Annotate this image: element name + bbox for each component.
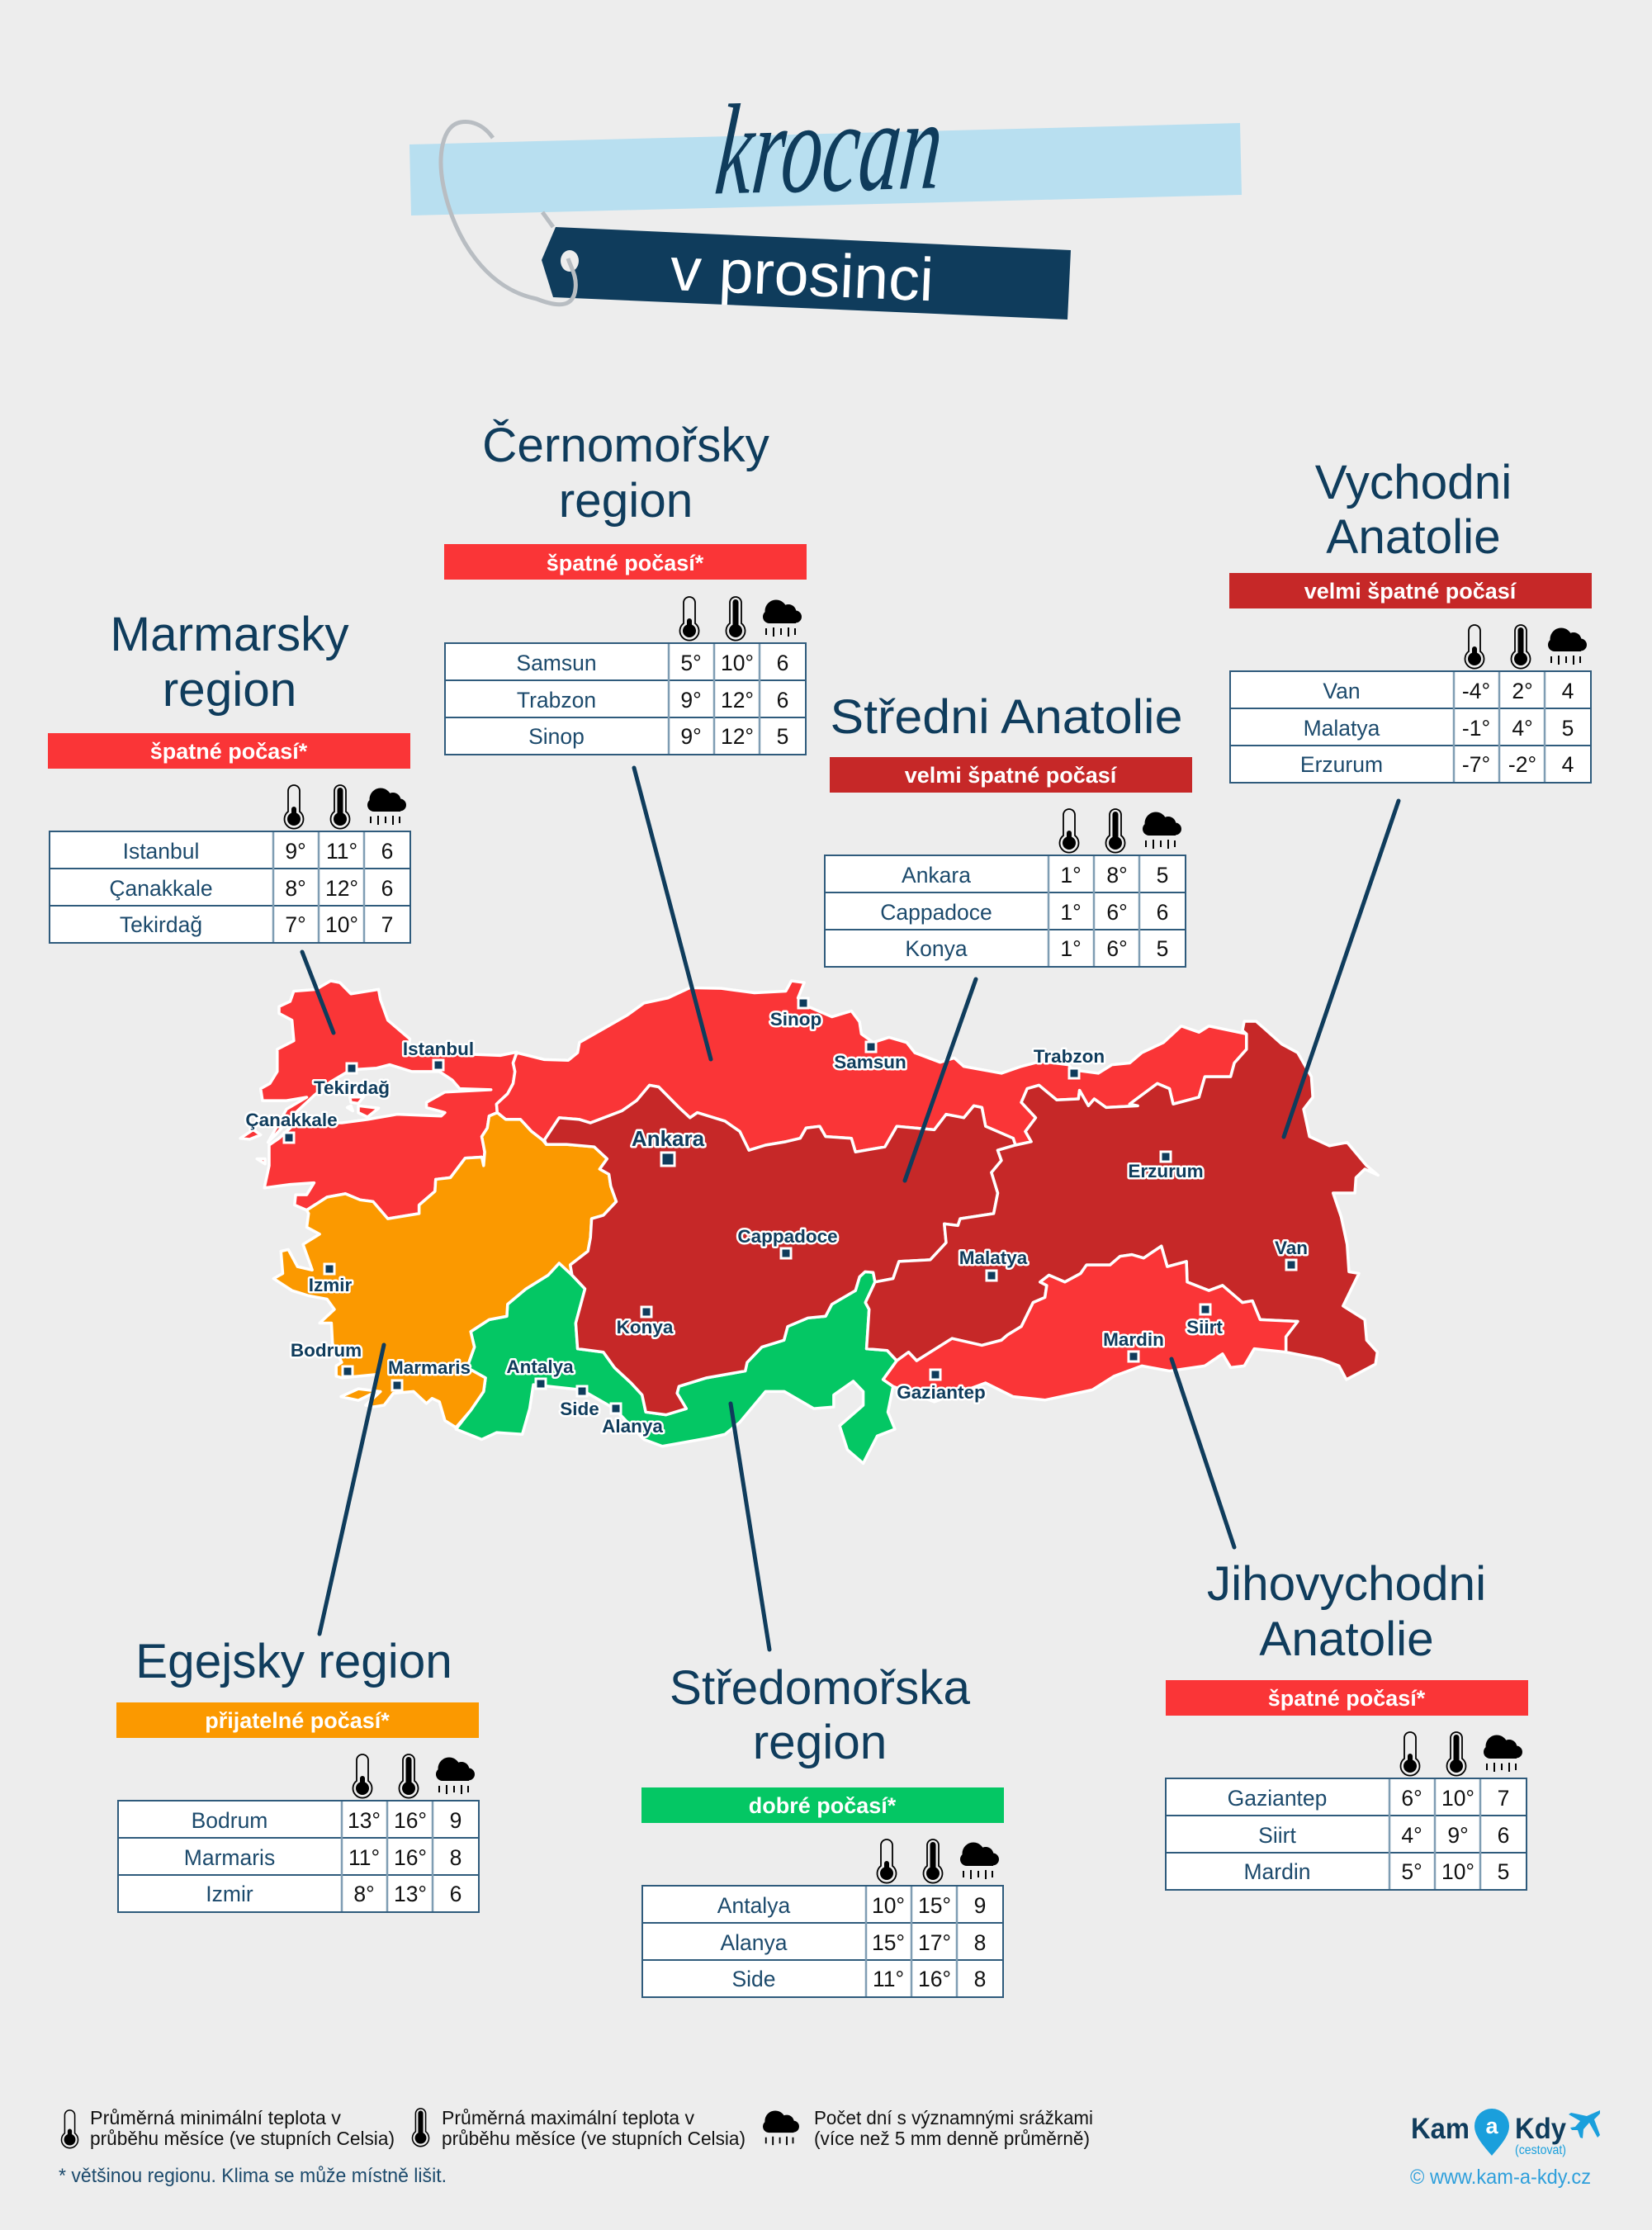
pointer: Aegean bbox=[320, 1345, 384, 1634]
city: Alanya: Alanya bbox=[602, 1416, 663, 1437]
data table: Antalya bbox=[717, 1893, 790, 1918]
legend text: maximum temperature: průběhu měsíce (ve stupních Celsia) bbox=[442, 2128, 746, 2149]
city: Cappadoce bbox=[737, 1226, 838, 1258]
light blue strip bbox=[409, 123, 1242, 215]
data table: Side bbox=[731, 1967, 776, 1991]
data table: 11° bbox=[348, 1845, 380, 1870]
data table: 5 bbox=[1157, 936, 1168, 961]
data table: 16° bbox=[394, 1808, 427, 1833]
data table: 9° bbox=[285, 839, 306, 864]
city: Tekirdağ bbox=[314, 1063, 390, 1098]
heading: region bbox=[163, 663, 296, 717]
city: Van: Van bbox=[1275, 1238, 1308, 1258]
data table: 13° bbox=[394, 1882, 427, 1906]
data table: 10° bbox=[721, 651, 754, 675]
panel: Vychodni Anatolie bbox=[1229, 456, 1592, 783]
city: Bodrum bbox=[291, 1340, 362, 1376]
data table: 2° bbox=[1512, 679, 1533, 703]
data table: 8° bbox=[285, 876, 306, 901]
panel: Jihovychodni Anatolie bbox=[1166, 1557, 1528, 1890]
data table bbox=[1166, 1732, 1527, 1890]
city: Samsun bbox=[834, 1042, 906, 1072]
region: Mediterranean bbox=[456, 1263, 897, 1463]
logo letter a: a bbox=[1485, 2114, 1498, 2138]
region: Marmara bbox=[240, 981, 517, 1219]
heading: Středni Anatolie bbox=[831, 690, 1182, 744]
data table: Ankara bbox=[902, 863, 971, 888]
data table: 9 bbox=[974, 1893, 986, 1918]
data table: 6° bbox=[1106, 936, 1128, 961]
data table: Istanbul bbox=[123, 839, 199, 864]
heading: Anatolie bbox=[1259, 1612, 1434, 1666]
weather band bbox=[444, 544, 807, 580]
weather label: špatné počasí* bbox=[150, 739, 308, 764]
panel: Černomořsky region bbox=[444, 419, 807, 755]
logo pin bbox=[1474, 2109, 1509, 2156]
heading: Jihovychodni bbox=[1207, 1557, 1486, 1611]
heading: Anatolie bbox=[1326, 510, 1501, 564]
data table: 12° bbox=[325, 876, 358, 901]
region: Eastern Anatolia bbox=[865, 1021, 1378, 1380]
data table bbox=[642, 1839, 1003, 1997]
city: Malatya: Malatya bbox=[959, 1248, 1028, 1268]
website: © www.kam-a-kdy.cz bbox=[1410, 2166, 1591, 2189]
pointer: Marmara bbox=[302, 952, 334, 1033]
city: Trabzon: Trabzon bbox=[1034, 1046, 1105, 1067]
data table: 5° bbox=[680, 651, 702, 675]
city: Mardin: Mardin bbox=[1103, 1329, 1164, 1350]
data table: 16° bbox=[918, 1967, 951, 1991]
city: Side bbox=[560, 1386, 599, 1419]
tag hole bbox=[561, 250, 579, 272]
pointer: Mediterranean bbox=[731, 1404, 769, 1650]
data table: 16° bbox=[394, 1845, 427, 1870]
data table: Çanakkale bbox=[109, 876, 213, 901]
data table: 5 bbox=[1562, 716, 1574, 741]
weather label: přijatelné počasí* bbox=[205, 1708, 390, 1733]
data table: Izmir bbox=[206, 1882, 253, 1906]
data table: 9 bbox=[450, 1808, 462, 1833]
region: Central Anatolia bbox=[544, 1085, 1015, 1415]
legend icon: maximum temperature bbox=[412, 2109, 429, 2147]
weather label: špatné počasí* bbox=[547, 551, 704, 575]
weather band bbox=[1166, 1680, 1528, 1716]
city: Gaziantep: Gaziantep bbox=[897, 1382, 986, 1403]
city: Malatya bbox=[959, 1248, 1028, 1281]
city: Siirt bbox=[1186, 1304, 1223, 1338]
data table: 7° bbox=[285, 912, 306, 937]
panel: Marmarsky region bbox=[48, 608, 410, 943]
data table: 10° bbox=[872, 1893, 905, 1918]
heading: region bbox=[753, 1716, 887, 1769]
city: Antalya: Antalya bbox=[506, 1356, 574, 1377]
data table: Samsun bbox=[516, 651, 597, 675]
map of Turkey bbox=[240, 768, 1399, 1650]
data table: 10° bbox=[1441, 1786, 1474, 1811]
city: Istanbul bbox=[403, 1039, 474, 1070]
weather band bbox=[116, 1702, 479, 1738]
data table: 9° bbox=[680, 688, 702, 713]
data table: 7 bbox=[381, 912, 393, 937]
pointer: Eastern Anatolia bbox=[1284, 801, 1399, 1137]
panel: Středomořska region bbox=[641, 1661, 1004, 1997]
city: Konya: Konya bbox=[617, 1317, 674, 1338]
city: Çanakkale bbox=[245, 1110, 338, 1143]
data table: 4 bbox=[1562, 752, 1574, 777]
data table: 4° bbox=[1401, 1823, 1422, 1848]
city: Antalya bbox=[506, 1356, 574, 1389]
tag ring bbox=[441, 122, 575, 305]
weather band bbox=[641, 1787, 1004, 1823]
data table bbox=[825, 809, 1186, 967]
data table: 12° bbox=[721, 724, 754, 749]
data table: Mardin bbox=[1243, 1859, 1311, 1884]
city: Çanakkale: Çanakkale bbox=[245, 1110, 338, 1130]
data table: 8° bbox=[353, 1882, 375, 1906]
data table: Malatya bbox=[1304, 716, 1380, 741]
legend text: minimum temperature: Průměrná minimální teplota v bbox=[90, 2107, 342, 2128]
data table: 10° bbox=[325, 912, 358, 937]
header: title strip and tag bbox=[409, 73, 1242, 320]
data table: 5 bbox=[777, 724, 788, 749]
data table bbox=[118, 1754, 479, 1912]
footnote: * většinou regionu. Klima se může místně lišit. bbox=[59, 2165, 447, 2187]
data table: -4° bbox=[1462, 679, 1490, 703]
data table: Marmaris bbox=[184, 1845, 275, 1870]
data table: Cappadoce bbox=[880, 900, 992, 925]
logo: Kam a Kdy bbox=[1410, 2109, 1600, 2189]
heading: Středomořska bbox=[670, 1661, 971, 1715]
data table: 6° bbox=[1106, 900, 1128, 925]
data table: -2° bbox=[1508, 752, 1536, 777]
panel: Egejsky region bbox=[116, 1635, 479, 1912]
data table: 8 bbox=[450, 1845, 462, 1870]
pointer: Southeastern Anatolia bbox=[1172, 1359, 1234, 1547]
city: Sinop: Sinop bbox=[770, 1009, 821, 1030]
region: Aegean bbox=[273, 1113, 616, 1427]
city: Ankara bbox=[632, 1126, 705, 1166]
city: Side: Side bbox=[560, 1399, 599, 1419]
heading: region bbox=[559, 474, 693, 528]
legend text: minimum temperature: průběhu měsíce (ve stupních Celsia) bbox=[90, 2128, 395, 2149]
weather band bbox=[830, 757, 1192, 793]
legend text: maximum temperature: Průměrná maximální teplota v bbox=[442, 2107, 694, 2128]
city: Konya bbox=[617, 1307, 674, 1338]
data table: 6 bbox=[1498, 1823, 1509, 1848]
logo subtitle: (cestovat) bbox=[1515, 2143, 1566, 2157]
data table: 17° bbox=[918, 1930, 951, 1955]
legend text: rain days: Počet dní s významnými srážkami bbox=[814, 2107, 1093, 2128]
title: krocan: krocan bbox=[710, 73, 949, 222]
data table: 8 bbox=[974, 1967, 986, 1991]
data table: 1° bbox=[1060, 863, 1082, 888]
city: Gaziantep bbox=[897, 1370, 986, 1403]
city: Istanbul: Istanbul bbox=[403, 1039, 474, 1059]
data table: 4° bbox=[1512, 716, 1533, 741]
city: Van bbox=[1275, 1238, 1308, 1270]
data table bbox=[445, 597, 806, 755]
data table: 1° bbox=[1060, 936, 1082, 961]
logo word Kam: Kam bbox=[1411, 2113, 1470, 2145]
pointer: Central Anatolia bbox=[905, 979, 976, 1181]
legend icon: minimum temperature bbox=[61, 2110, 78, 2148]
data table: Sinop bbox=[528, 724, 585, 749]
data table: -7° bbox=[1462, 752, 1490, 777]
weather band bbox=[48, 733, 410, 769]
data table: 6 bbox=[777, 651, 788, 675]
heading: Egejsky region bbox=[135, 1635, 452, 1688]
legend icon: rain days bbox=[763, 2110, 799, 2145]
data table: 1° bbox=[1060, 900, 1082, 925]
city: Cappadoce: Cappadoce bbox=[737, 1226, 838, 1247]
weather band bbox=[1229, 573, 1592, 608]
city: Bodrum: Bodrum bbox=[291, 1340, 362, 1361]
region: Black Sea bbox=[496, 981, 1247, 1152]
city: Trabzon bbox=[1034, 1046, 1105, 1078]
city markers and labels bbox=[245, 998, 1308, 1437]
data table: 6 bbox=[777, 688, 788, 713]
city: Erzurum: Erzurum bbox=[1128, 1161, 1204, 1181]
city: Alanya bbox=[602, 1404, 663, 1437]
heading: Černomořsky bbox=[482, 419, 770, 472]
data table: Erzurum bbox=[1300, 752, 1383, 777]
data table: 12° bbox=[721, 688, 754, 713]
data table: Van bbox=[1323, 679, 1361, 703]
city: Izmir bbox=[309, 1264, 353, 1295]
data table: 6 bbox=[450, 1882, 462, 1906]
data table: 8 bbox=[974, 1930, 986, 1955]
data table: 4 bbox=[1562, 679, 1574, 703]
data table: Siirt bbox=[1258, 1823, 1296, 1848]
pointer lines bbox=[302, 768, 1399, 1650]
city: Mardin bbox=[1103, 1329, 1164, 1361]
data table: Tekirdağ bbox=[120, 912, 202, 937]
data table bbox=[1230, 625, 1591, 783]
data table: Gaziantep bbox=[1228, 1786, 1327, 1811]
weather label: dobré počasí* bbox=[749, 1793, 897, 1818]
data table: 6 bbox=[1157, 900, 1168, 925]
data table: 6° bbox=[1401, 1786, 1422, 1811]
legend text: rain days: (více než 5 mm denně průměrně) bbox=[814, 2128, 1090, 2149]
logo word Kdy: Kdy bbox=[1515, 2113, 1566, 2145]
data table: 13° bbox=[348, 1808, 381, 1833]
data table: Alanya bbox=[720, 1930, 788, 1955]
city: Siirt: Siirt bbox=[1186, 1317, 1223, 1338]
heading: Vychodni bbox=[1315, 456, 1512, 509]
data table: Bodrum bbox=[192, 1808, 267, 1833]
data table: 11° bbox=[873, 1967, 904, 1991]
data table: 11° bbox=[326, 839, 357, 864]
weather label: špatné počasí* bbox=[1268, 1686, 1426, 1711]
city: Samsun: Samsun bbox=[834, 1052, 906, 1072]
data table: Konya bbox=[905, 936, 968, 961]
city: Ankara: Ankara bbox=[632, 1126, 705, 1151]
data table: 6 bbox=[381, 876, 393, 901]
icon: plane bbox=[1569, 2110, 1600, 2138]
data table: 9° bbox=[680, 724, 702, 749]
data table: -1° bbox=[1462, 716, 1490, 741]
data table: 5 bbox=[1498, 1859, 1509, 1884]
city: Marmaris bbox=[388, 1357, 471, 1390]
city: Sinop bbox=[770, 998, 821, 1030]
data table: 9° bbox=[1447, 1823, 1469, 1848]
pointer: Black Sea bbox=[634, 768, 711, 1059]
data table: 8° bbox=[1106, 863, 1128, 888]
region: Southeastern Anatolia bbox=[883, 1246, 1298, 1402]
data table: 6 bbox=[381, 839, 393, 864]
data table bbox=[50, 785, 410, 943]
data table: 5 bbox=[1157, 863, 1168, 888]
data table: 5° bbox=[1401, 1859, 1422, 1884]
heading: Marmarsky bbox=[110, 608, 349, 661]
panel: Středni Anatolie bbox=[825, 690, 1192, 967]
city: Marmaris: Marmaris bbox=[388, 1357, 471, 1378]
weather label: velmi špatné počasí bbox=[1304, 579, 1517, 604]
data table: 15° bbox=[918, 1893, 951, 1918]
data table: 10° bbox=[1441, 1859, 1474, 1884]
subtitle: v prosinci: v prosinci bbox=[669, 234, 935, 314]
data table: 15° bbox=[872, 1930, 905, 1955]
legend bbox=[59, 2107, 1093, 2187]
data table: 7 bbox=[1498, 1786, 1509, 1811]
city: Izmir: Izmir bbox=[309, 1275, 353, 1295]
navy tag bbox=[542, 227, 1071, 320]
weather label: velmi špatné počasí bbox=[905, 763, 1118, 788]
city: Tekirdağ: Tekirdağ bbox=[314, 1077, 390, 1098]
city: Erzurum bbox=[1128, 1152, 1204, 1181]
map regions bbox=[240, 981, 1378, 1463]
data table: Trabzon bbox=[517, 688, 596, 713]
